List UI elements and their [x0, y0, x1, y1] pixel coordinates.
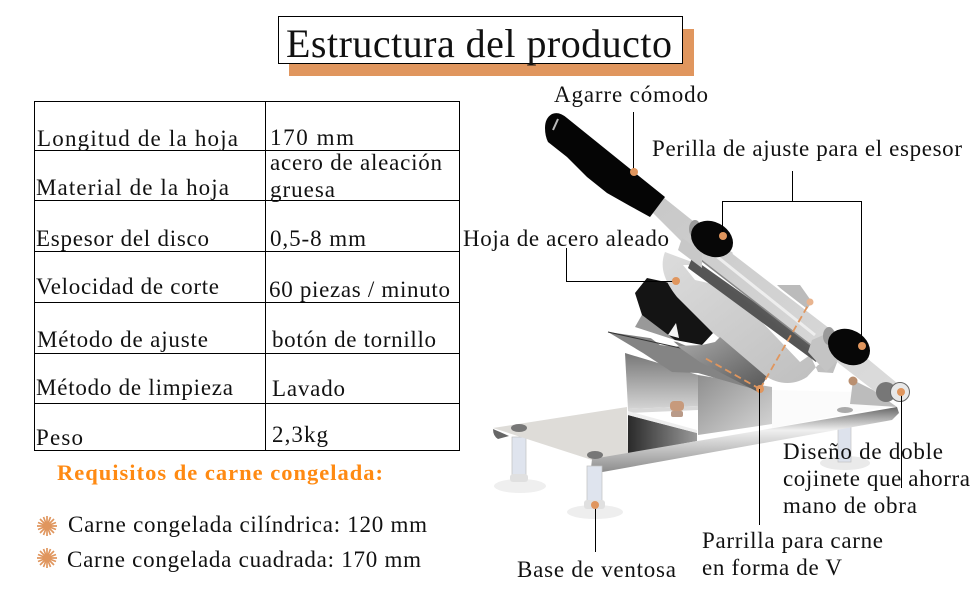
arm	[653, 197, 897, 397]
tray	[608, 332, 757, 390]
callout: comfortable grip	[554, 82, 708, 176]
food holder	[635, 278, 713, 345]
callout: thickness adjustment knob	[652, 136, 962, 350]
rear suction feet	[494, 426, 870, 493]
requirement: cylindrical meat: Carne congelada cilíndrica: 120 mm	[68, 512, 427, 537]
handle	[545, 113, 665, 217]
specification table: Velocidad de corte	[36, 274, 219, 299]
callout: thickness adjustment knob: Perilla de ajuste para el espesor	[652, 136, 962, 161]
specification table: gruesa	[270, 177, 335, 202]
title: Estructura del producto	[286, 21, 672, 66]
specification table: 2,3kg	[272, 422, 328, 447]
blade	[663, 252, 838, 383]
specification table: Método de ajuste	[37, 327, 208, 352]
callout: double bearing design: cojinete que ahorra	[783, 466, 970, 491]
base plate	[493, 407, 628, 460]
rear hopper	[777, 285, 812, 312]
specification table: 170 mm	[270, 125, 354, 150]
end bearing	[876, 382, 896, 402]
front suction foot	[567, 466, 623, 519]
blade carriage	[677, 337, 767, 392]
specification table	[34, 101, 460, 451]
callout: comfortable grip: Agarre cómodo	[554, 82, 708, 107]
knob lower	[822, 322, 876, 372]
specification table: 0,5-8 mm	[270, 226, 366, 251]
callout: alloy steel blade: Hoja de acero aleado	[463, 226, 669, 251]
specification table: Método de limpieza	[36, 375, 233, 400]
callout: V-shaped meat grill: Parrilla para carne	[702, 528, 883, 553]
arm clamp	[678, 238, 702, 268]
specification table: Longitud de la hoja	[37, 126, 238, 151]
specification table: Lavado	[272, 376, 345, 401]
specification table: Espesor del disco	[36, 226, 209, 251]
callout: suction cup base: Base de ventosa	[517, 557, 676, 582]
callout: alloy steel blade	[463, 226, 680, 285]
plate bolts	[511, 424, 527, 432]
callout: double bearing design: Diseño de doble	[783, 439, 943, 464]
specification table: Peso	[36, 425, 83, 450]
specification table: Material de la hoja	[36, 175, 229, 200]
specification table: 60 piezas / minuto	[269, 277, 450, 302]
callout: double bearing design	[783, 388, 970, 518]
specification table: acero de aleación	[270, 150, 442, 175]
knob upper	[685, 214, 739, 264]
copper screw	[670, 401, 684, 417]
steel strip	[688, 258, 822, 362]
frozen meat requirements heading: Requisitos de carne congelada:	[57, 460, 383, 485]
meat slicer illustration	[493, 113, 910, 519]
callout: suction cup base	[517, 501, 676, 582]
callout: double bearing design: mano de obra	[783, 493, 917, 518]
specification table: botón de tornillo	[272, 327, 436, 352]
callout: V-shaped meat grill	[702, 298, 883, 580]
callout: V-shaped meat grill: en forma de V	[702, 555, 842, 580]
meat guard	[635, 313, 690, 340]
stand	[625, 353, 698, 409]
requirement: square meat: Carne congelada cuadrada: 170 mm	[67, 547, 421, 572]
bearing bracket	[850, 380, 897, 407]
front rail	[591, 407, 899, 473]
